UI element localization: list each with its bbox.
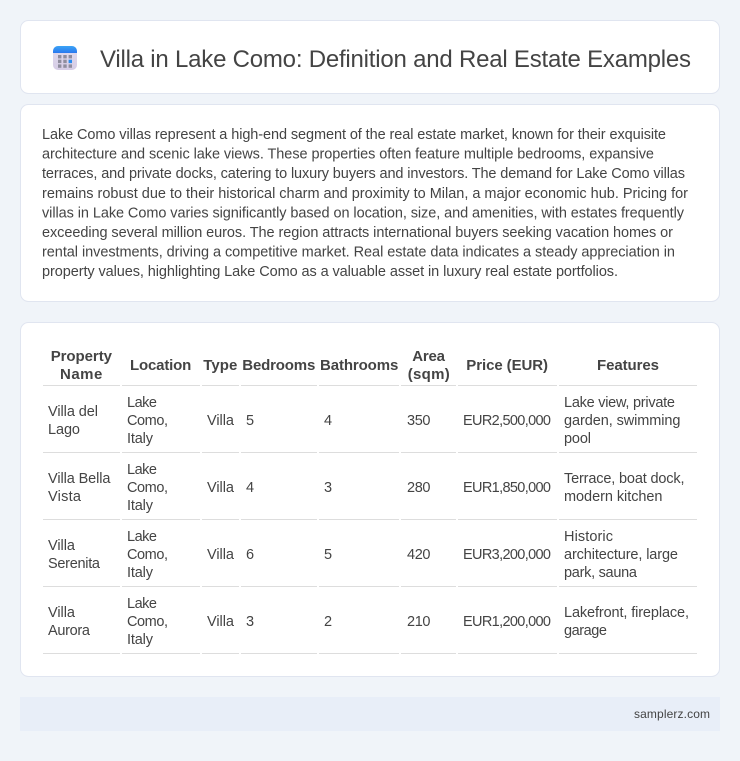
table row: Villa del Lago: Como,: [127, 413, 168, 429]
table header row: Features: [597, 357, 659, 374]
table row: Villa Aurora: Villa: [48, 605, 76, 621]
text block: description paragraph: Lake Como villas represent a high-end segment of the real estate market, known for their exquisite: [42, 127, 666, 143]
table row: Villa Aurora: Lakefront, fireplace,: [564, 605, 689, 621]
table row: Villa Bella Vista: Terrace, boat dock,: [564, 471, 684, 487]
table row: Villa Bella Vista: 3: [324, 480, 332, 496]
table row: Villa del Lago: Italy: [127, 431, 154, 447]
table row: Villa del Lago: pool: [564, 431, 591, 447]
table row: Villa del Lago: 5: [246, 413, 254, 429]
panel: description: [20, 104, 720, 302]
text block: description paragraph: remains robust due to their historical charm and proximity to Milan, a major economic hub. Pricing for: [42, 186, 688, 202]
table row: Villa del Lago: Lago: [48, 422, 80, 438]
table row: Villa Serenita: Historic: [564, 529, 613, 545]
table row: Villa del Lago: garden, swimming: [564, 413, 680, 429]
text block: description paragraph: property values, highlighting Lake Como as a valuable asset in luxury real estate portfolios.: [42, 264, 618, 280]
table row: Villa Serenita: [43, 529, 697, 587]
table row: Villa del Lago: Villa: [207, 413, 235, 429]
table header row: [43, 348, 697, 386]
table row: Villa Serenita: park, sauna: [564, 565, 638, 581]
footer bar: [20, 697, 720, 731]
table row: Villa Serenita: architecture, large: [564, 547, 678, 563]
table row: Villa del Lago: Villa del: [48, 404, 98, 420]
table row: Villa Bella Vista: 280: [407, 480, 430, 496]
footer source text: samplerz.com: [634, 707, 710, 721]
table row: Villa Aurora: [43, 596, 697, 654]
table row: Villa Serenita: Serenita: [48, 556, 101, 572]
table row: Villa Bella Vista: Villa: [207, 480, 235, 496]
table header row: Property: [51, 348, 113, 365]
table header row: Area: [412, 348, 446, 365]
table header row: (sqm): [408, 366, 450, 383]
table row: Villa Bella Vista: modern kitchen: [564, 489, 662, 505]
table row: Villa Bella Vista: Como,: [127, 480, 168, 496]
table header row: Bedrooms: [242, 357, 315, 374]
table row: Villa Serenita: Lake: [127, 529, 157, 545]
table row: Villa del Lago: EUR2,500,000: [463, 413, 551, 429]
table row: Villa Aurora: Villa: [207, 614, 235, 630]
table row: Villa Aurora: Aurora: [48, 623, 91, 639]
table row: Villa Serenita: EUR3,200,000: [463, 547, 551, 563]
panel: title header: [20, 20, 720, 94]
panel: property table: [20, 322, 720, 676]
table row: Villa Serenita: Villa: [207, 547, 235, 563]
table header row: Location: [130, 357, 191, 374]
table header row: Name: [60, 366, 102, 383]
text block: description paragraph: architecture and scenic lake views. These properties often feature multiple bedrooms, expansive: [42, 147, 654, 163]
table row: Villa Serenita: 5: [324, 547, 332, 563]
table row: Villa Aurora: Lake: [127, 596, 157, 612]
text block: description paragraph: rental investments, driving a competitive market. Real estate data indicates a steady appreciation in: [42, 245, 675, 261]
text block: description paragraph: exceeding several million euros. The region attracts international buyers seeking vacation homes or: [42, 225, 673, 241]
table row: Villa Aurora: 210: [407, 614, 430, 630]
table row: Villa Serenita: Italy: [127, 565, 154, 581]
table row: Villa del Lago: Lake: [127, 395, 157, 411]
table header row: Price (EUR): [466, 357, 548, 374]
table row: Villa del Lago: Lake view, private: [564, 395, 675, 411]
title: Villa in Lake Como: Definition and Real Estate Examples: [100, 46, 691, 73]
table row: Villa Bella Vista: [43, 462, 697, 520]
table row: Villa Bella Vista: Italy: [127, 498, 154, 514]
text block: description paragraph: villas in Lake Como varies significantly based on location, size, and amenities, with estates frequently: [42, 205, 685, 221]
table row: Villa Bella Vista: Lake: [127, 462, 157, 478]
table row: Villa Bella Vista: Vista: [48, 489, 82, 505]
table row: Villa Aurora: garage: [564, 623, 607, 639]
table header row: Bathrooms: [320, 357, 398, 374]
table header row: Type: [203, 357, 237, 374]
table row: Villa Serenita: Villa: [48, 538, 76, 554]
table row: Villa Aurora: Como,: [127, 614, 168, 630]
table row: Villa Aurora: EUR1,200,000: [463, 614, 551, 630]
table row: Villa del Lago: 350: [407, 413, 430, 429]
table row: Villa Bella Vista: 4: [246, 480, 254, 496]
table row: Villa Serenita: 6: [246, 547, 254, 563]
icon: calendar: [53, 46, 77, 70]
table row: Villa Serenita: 420: [407, 547, 430, 563]
table row: Villa Aurora: 2: [324, 614, 332, 630]
text block: description paragraph: [42, 127, 688, 280]
text block: description paragraph: terraces, and private docks, catering to luxury buyers and investors. The demand for Lake Como villas: [42, 166, 685, 182]
table row: Villa Bella Vista: EUR1,850,000: [463, 480, 551, 496]
table row: Villa Aurora: 3: [246, 614, 254, 630]
table row: Villa Serenita: Como,: [127, 547, 168, 563]
table row: Villa del Lago: [43, 395, 697, 453]
table row: Villa Bella Vista: Villa Bella: [48, 471, 111, 487]
table row: Villa Aurora: Italy: [127, 632, 154, 648]
table row: Villa del Lago: 4: [324, 413, 332, 429]
